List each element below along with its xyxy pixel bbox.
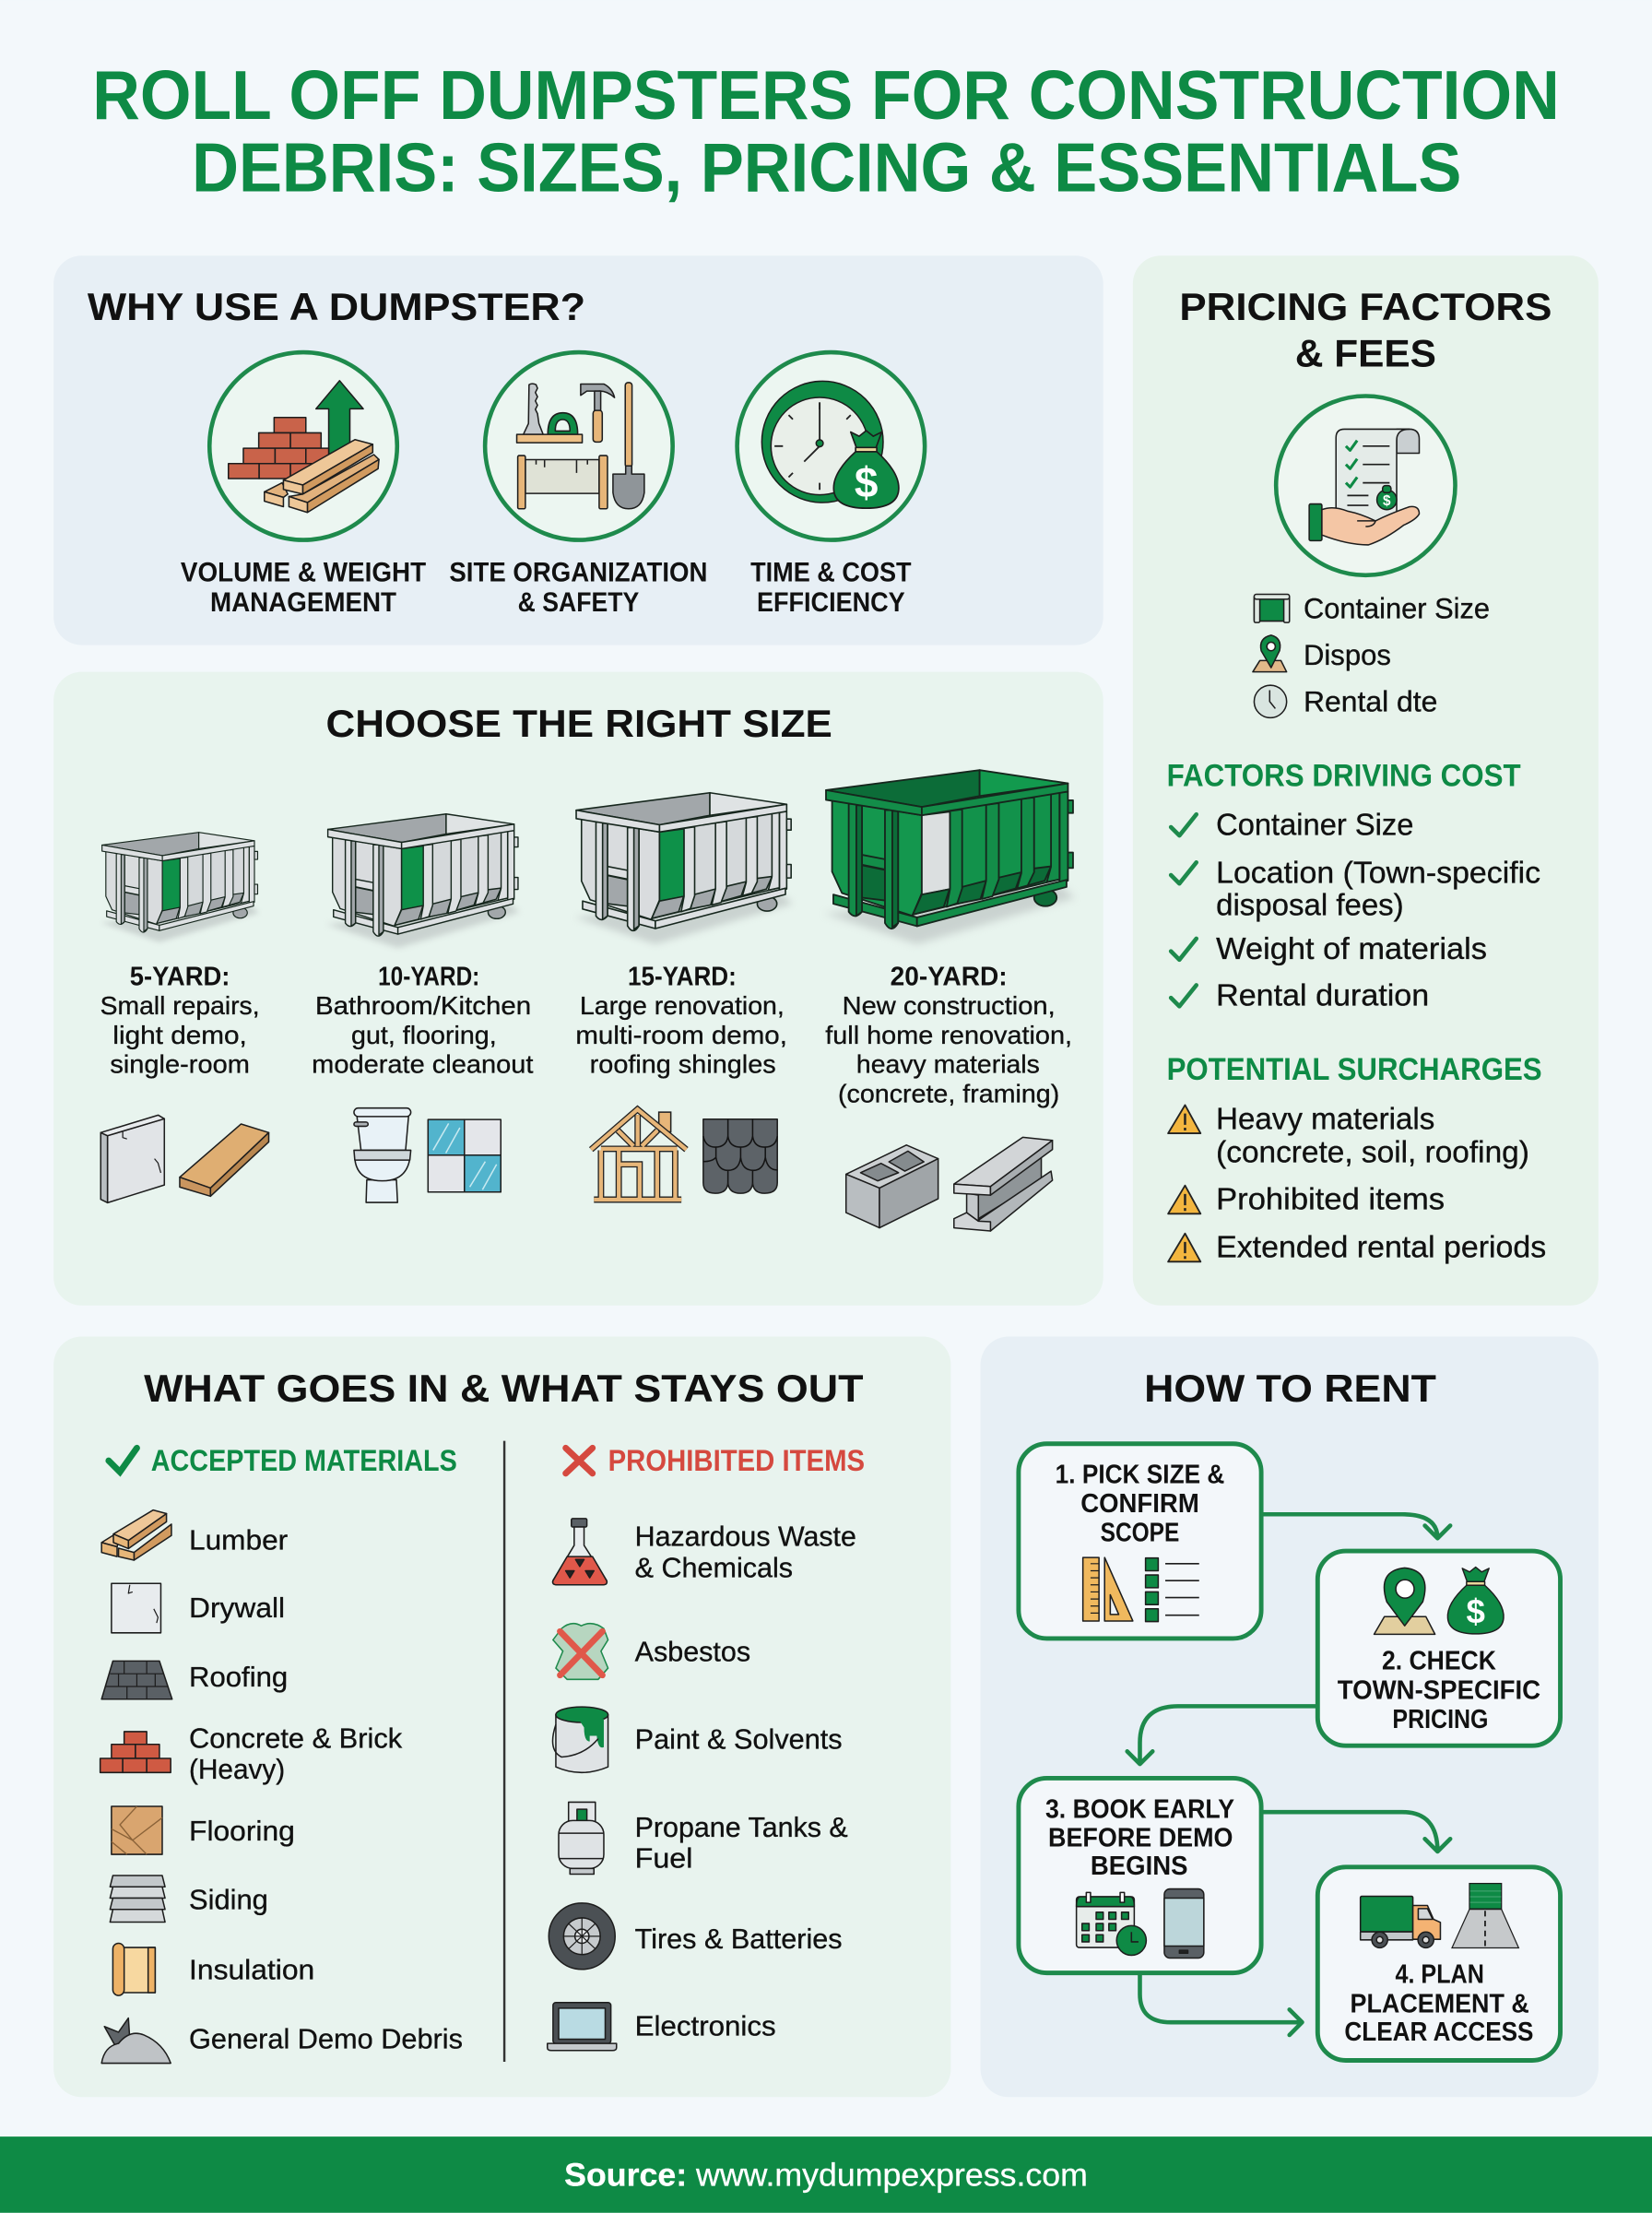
heading: accepted materials: ACCEPTED MATERIALS	[151, 1444, 457, 1477]
heading: why use a dumpster: WHY USE A DUMPSTER?	[88, 286, 585, 328]
text: 5-yard: light demo,	[112, 1021, 247, 1049]
label: time and cost efficiency	[750, 558, 912, 618]
text: 15-yard: multi-room demo,	[575, 1021, 787, 1049]
heading: factors driving cost: FACTORS DRIVING COST	[1167, 759, 1521, 794]
item: siding	[110, 1876, 268, 1923]
icon: money bag	[1447, 1568, 1504, 1634]
text: 20-yard: full home renovation,	[825, 1021, 1072, 1049]
icon: wood plank	[180, 1124, 269, 1196]
item: propane tanks: Fuel	[635, 1843, 692, 1875]
step 3: book early: 3. BOOK EARLY	[1045, 1794, 1234, 1824]
list: pricing summary	[1253, 593, 1490, 718]
heading: pricing factors and fees	[1179, 286, 1552, 374]
list: potential surcharges: Heavy materials	[1216, 1101, 1434, 1135]
item: asbestos	[553, 1624, 750, 1679]
list: potential surcharges: Prohibited items	[1216, 1182, 1445, 1216]
text: 20-yard: 20-YARD:	[891, 961, 1008, 990]
arrow: step 2 to step 3	[1127, 1706, 1317, 1764]
list: potential surcharges: (concrete, soil, roofing)	[1216, 1134, 1529, 1168]
item: drywall: Drywall	[189, 1592, 285, 1624]
icon: warning	[1168, 1186, 1200, 1213]
arrow: step 3 to step 4	[1261, 1812, 1450, 1852]
item: hazardous waste	[553, 1519, 856, 1585]
icon: checklist	[1146, 1558, 1199, 1622]
text: 10-yard: Bathroom/Kitchen	[315, 991, 531, 1020]
list: pricing summary: Container Size	[1304, 593, 1490, 625]
item: insulation	[112, 1943, 314, 1995]
item: roofing	[101, 1661, 288, 1699]
column: accepted materials	[100, 1444, 463, 2064]
icon: ruler and set square	[1083, 1557, 1133, 1621]
list: factors driving cost: disposal fees)	[1216, 888, 1404, 922]
item: electronics	[548, 2003, 776, 2051]
item: lumber: Lumber	[189, 1525, 288, 1556]
icon: phone	[1164, 1889, 1204, 1959]
arrow: step 3 to placement	[1139, 1973, 1302, 2035]
panel: pricing factors and fees	[1133, 255, 1599, 1306]
step 2: check pricing: TOWN-SPECIFIC	[1338, 1676, 1540, 1706]
footer: source: Source: www.mydumpexpress.com	[564, 2158, 1088, 2194]
step 3: book early: BEFORE DEMO	[1048, 1824, 1233, 1853]
item: hazardous waste: & Chemicals	[635, 1552, 793, 1583]
item: general demo debris	[101, 2018, 463, 2064]
item: tires and batteries: Tires & Batteries	[635, 1923, 843, 1955]
list: potential surcharges	[1168, 1101, 1546, 1264]
step 1: pick size: SCOPE	[1101, 1518, 1179, 1547]
icon: drywall sheet	[100, 1115, 164, 1202]
item: drywall	[112, 1583, 285, 1633]
text: 5-yard: Small repairs,	[100, 991, 260, 1020]
icon: dumpster on access road	[1452, 1884, 1518, 1948]
icon: money bag: $	[1466, 1592, 1485, 1630]
item: concrete and brick: (Heavy)	[189, 1754, 285, 1785]
text: 20-yard: (concrete, framing)	[838, 1079, 1059, 1107]
icon: calendar with clock	[1077, 1892, 1146, 1955]
icon: warning	[1168, 1105, 1200, 1133]
icon: clock and money bag	[738, 352, 925, 540]
step 4: plan placement: 4. PLAN	[1395, 1959, 1484, 1989]
list: factors driving cost	[1171, 807, 1540, 1012]
icon: steel I-beam	[954, 1137, 1053, 1231]
label: time and cost efficiency: EFFICIENCY	[757, 587, 905, 618]
item: concrete and brick	[100, 1723, 403, 1785]
icon: delivery truck	[1361, 1897, 1440, 1947]
title: ROLL OFF DUMPSTERS FOR CONSTRUCTION	[92, 56, 1560, 134]
panel: why use a dumpster	[53, 255, 1103, 645]
panel: what goes in and what stays out	[53, 1336, 950, 2097]
step 4: plan placement	[1317, 1867, 1561, 2060]
text: 20-yard: heavy materials	[856, 1049, 1040, 1078]
list: factors driving cost: Container Size	[1216, 807, 1413, 841]
column: prohibited items	[548, 1444, 865, 2051]
item: propane tanks	[559, 1802, 848, 1875]
text: 5-yard: single-room	[110, 1049, 250, 1078]
icon: toilet	[354, 1108, 411, 1202]
title	[92, 56, 1560, 207]
heading: pricing factors and fees: & FEES	[1295, 332, 1436, 374]
item: siding: Siding	[189, 1885, 268, 1916]
step 1: pick size: 1. PICK SIZE &	[1056, 1461, 1224, 1490]
dumpster: 20-yard	[824, 770, 1075, 944]
text: 10-yard	[312, 961, 534, 1078]
label: site organization and safety: & SAFETY	[518, 587, 639, 618]
label: site organization and safety	[449, 558, 707, 618]
icon: location pin	[1253, 635, 1287, 672]
item: lumber	[101, 1510, 288, 1560]
text: 10-yard: 10-YARD:	[378, 961, 479, 990]
item: flooring	[112, 1806, 295, 1854]
item: hazardous waste: Hazardous Waste	[635, 1521, 856, 1553]
item: roofing: Roofing	[189, 1662, 288, 1693]
icon: roof shingles	[703, 1119, 777, 1193]
icon: bricks, lumber and up arrow	[209, 352, 397, 540]
icon: quote document in hand: $	[1383, 493, 1391, 509]
panel: choose the right size	[53, 672, 1103, 1306]
heading: choose the right size: CHOOSE THE RIGHT SIZE	[326, 703, 832, 745]
icon: quote document in hand	[1276, 396, 1456, 575]
text: 10-yard: moderate cleanout	[312, 1049, 534, 1078]
text: 20-yard: New construction,	[843, 991, 1056, 1020]
item: electronics: Electronics	[635, 2011, 776, 2042]
step 3: book early	[1019, 1778, 1261, 1973]
icon: warning	[1168, 1234, 1200, 1261]
heading: potential surcharges: POTENTIAL SURCHARGES	[1167, 1052, 1542, 1087]
icon: house frame	[591, 1109, 686, 1200]
label: volume and weight management	[181, 558, 426, 618]
step 3: book early: BEGINS	[1091, 1852, 1188, 1881]
text: 15-yard: 15-YARD:	[628, 961, 737, 990]
heading: how to rent: HOW TO RENT	[1144, 1367, 1436, 1410]
footer: source	[0, 2136, 1652, 2213]
label: volume and weight management: MANAGEMENT	[210, 587, 396, 618]
dumpster: 5-yard	[100, 833, 259, 942]
icon: clock	[1254, 685, 1287, 717]
text: 15-yard	[575, 961, 787, 1078]
text: 15-yard: roofing shingles	[590, 1049, 776, 1078]
item: paint and solvents: Paint & Solvents	[635, 1723, 843, 1755]
heading: what goes in and what stays out: WHAT GOES IN & WHAT STAYS OUT	[144, 1367, 864, 1410]
step 2: check pricing: 2. CHECK	[1382, 1647, 1496, 1676]
heading: prohibited items: PROHIBITED ITEMS	[608, 1444, 865, 1477]
item: tires and batteries	[549, 1903, 843, 1970]
item: insulation: Insulation	[189, 1955, 314, 1986]
step 1: pick size: CONFIRM	[1080, 1489, 1199, 1519]
icon: tiles	[428, 1119, 501, 1192]
text: 5-yard: 5-YARD:	[130, 961, 230, 990]
arrow: step 1 to step 2	[1261, 1514, 1450, 1538]
step 4: plan placement: CLEAR ACCESS	[1344, 2018, 1533, 2047]
list: factors driving cost: Weight of materials	[1216, 931, 1487, 965]
icon: site tools	[485, 352, 673, 540]
list: factors driving cost: Rental duration	[1216, 978, 1429, 1012]
item: asbestos: Asbestos	[635, 1636, 750, 1667]
list: factors driving cost: Location (Town-specific	[1216, 855, 1540, 889]
list: pricing summary: Dispos	[1304, 639, 1391, 671]
step 1: pick size	[1019, 1444, 1261, 1639]
item: concrete and brick: Concrete & Brick	[189, 1723, 403, 1755]
item: paint and solvents	[553, 1707, 843, 1772]
icon: clock and money bag: $	[855, 458, 878, 506]
step 4: plan placement: PLACEMENT &	[1351, 1989, 1529, 2018]
dumpster: 15-yard	[574, 793, 793, 944]
text: 20-yard	[825, 961, 1072, 1107]
label: volume and weight management: VOLUME & WEIGHT	[181, 558, 426, 588]
label: time and cost efficiency: TIME & COST	[750, 558, 912, 588]
panel: how to rent	[981, 1336, 1599, 2097]
list: potential surcharges: Extended rental periods	[1216, 1230, 1546, 1264]
item: general demo debris: General Demo Debris	[189, 2023, 463, 2054]
step 2: check pricing: PRICING	[1392, 1705, 1488, 1734]
dumpster: 10-yard	[326, 814, 520, 948]
icon: cinder block	[846, 1145, 938, 1228]
step 2: check pricing	[1317, 1551, 1561, 1746]
heading: pricing factors and fees: PRICING FACTORS	[1179, 286, 1552, 328]
item: flooring: Flooring	[189, 1816, 295, 1847]
icon: location pin on map	[1375, 1568, 1435, 1634]
label: site organization and safety: SITE ORGANIZATION	[449, 558, 707, 588]
title: DEBRIS: SIZES, PRICING & ESSENTIALS	[192, 129, 1461, 207]
icon: container	[1254, 594, 1290, 622]
list: pricing summary: Rental dte	[1304, 686, 1437, 718]
text: 5-yard	[100, 961, 260, 1078]
text: 10-yard: gut, flooring,	[351, 1021, 497, 1049]
text: 15-yard: Large renovation,	[580, 991, 785, 1020]
item: propane tanks: Propane Tanks &	[635, 1812, 848, 1843]
